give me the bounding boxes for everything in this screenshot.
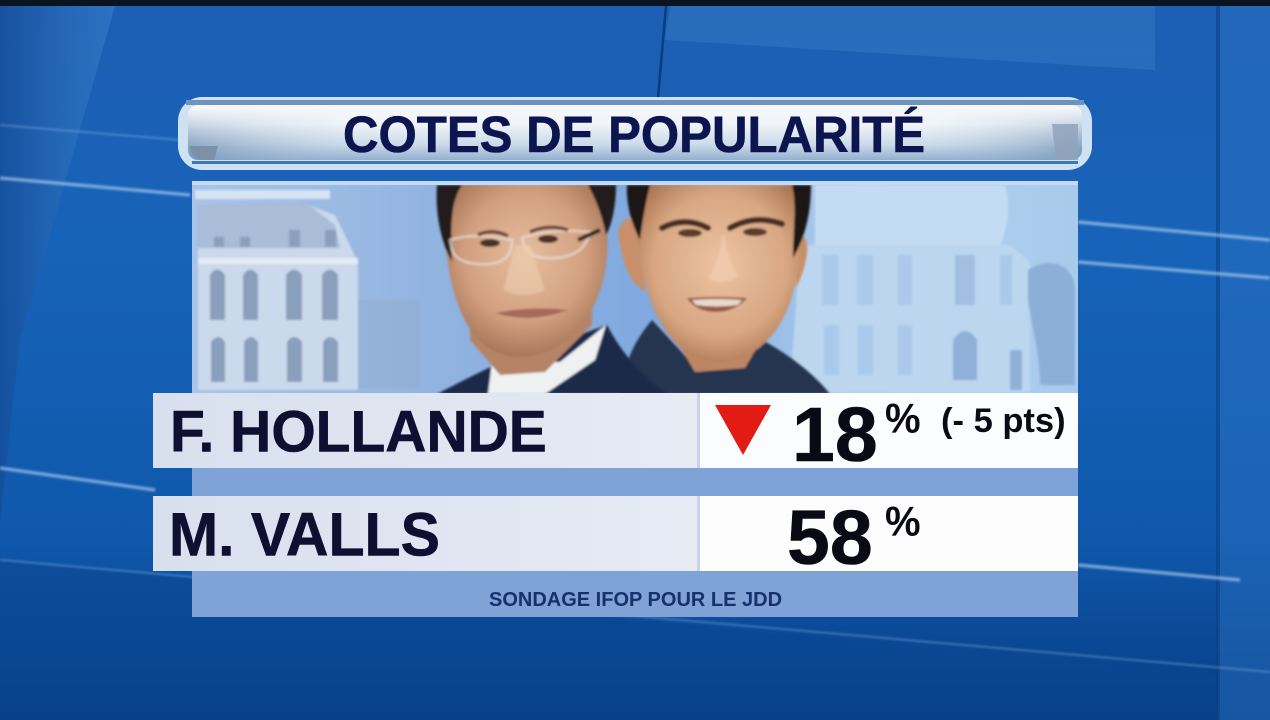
panel: photo background — [192, 181, 1078, 617]
source: SONDAGE IFOP POUR LE JDD — [489, 589, 782, 611]
label: M. Valls: M. VALLS — [169, 501, 440, 569]
change: -5 pts: (- 5 pts) — [941, 402, 1066, 440]
building right — [790, 185, 1075, 392]
value: Hollande 18%: 18 — [792, 392, 878, 478]
percent sign Hollande: % — [885, 396, 921, 442]
title bar — [178, 97, 1092, 170]
portrait: M. Valls — [618, 185, 830, 394]
percent sign Valls: % — [885, 499, 921, 545]
row: M. Valls — [153, 496, 1078, 571]
icon: down triangle — [715, 405, 771, 455]
title: COTES DE POPULARITÉ — [343, 107, 925, 164]
value: Valls 58%: 58 — [787, 495, 873, 581]
portrait: F. Hollande — [437, 185, 668, 394]
row: F. Hollande — [153, 393, 1078, 468]
label: F. Hollande: F. HOLLANDE — [170, 399, 547, 465]
building left — [195, 190, 420, 390]
